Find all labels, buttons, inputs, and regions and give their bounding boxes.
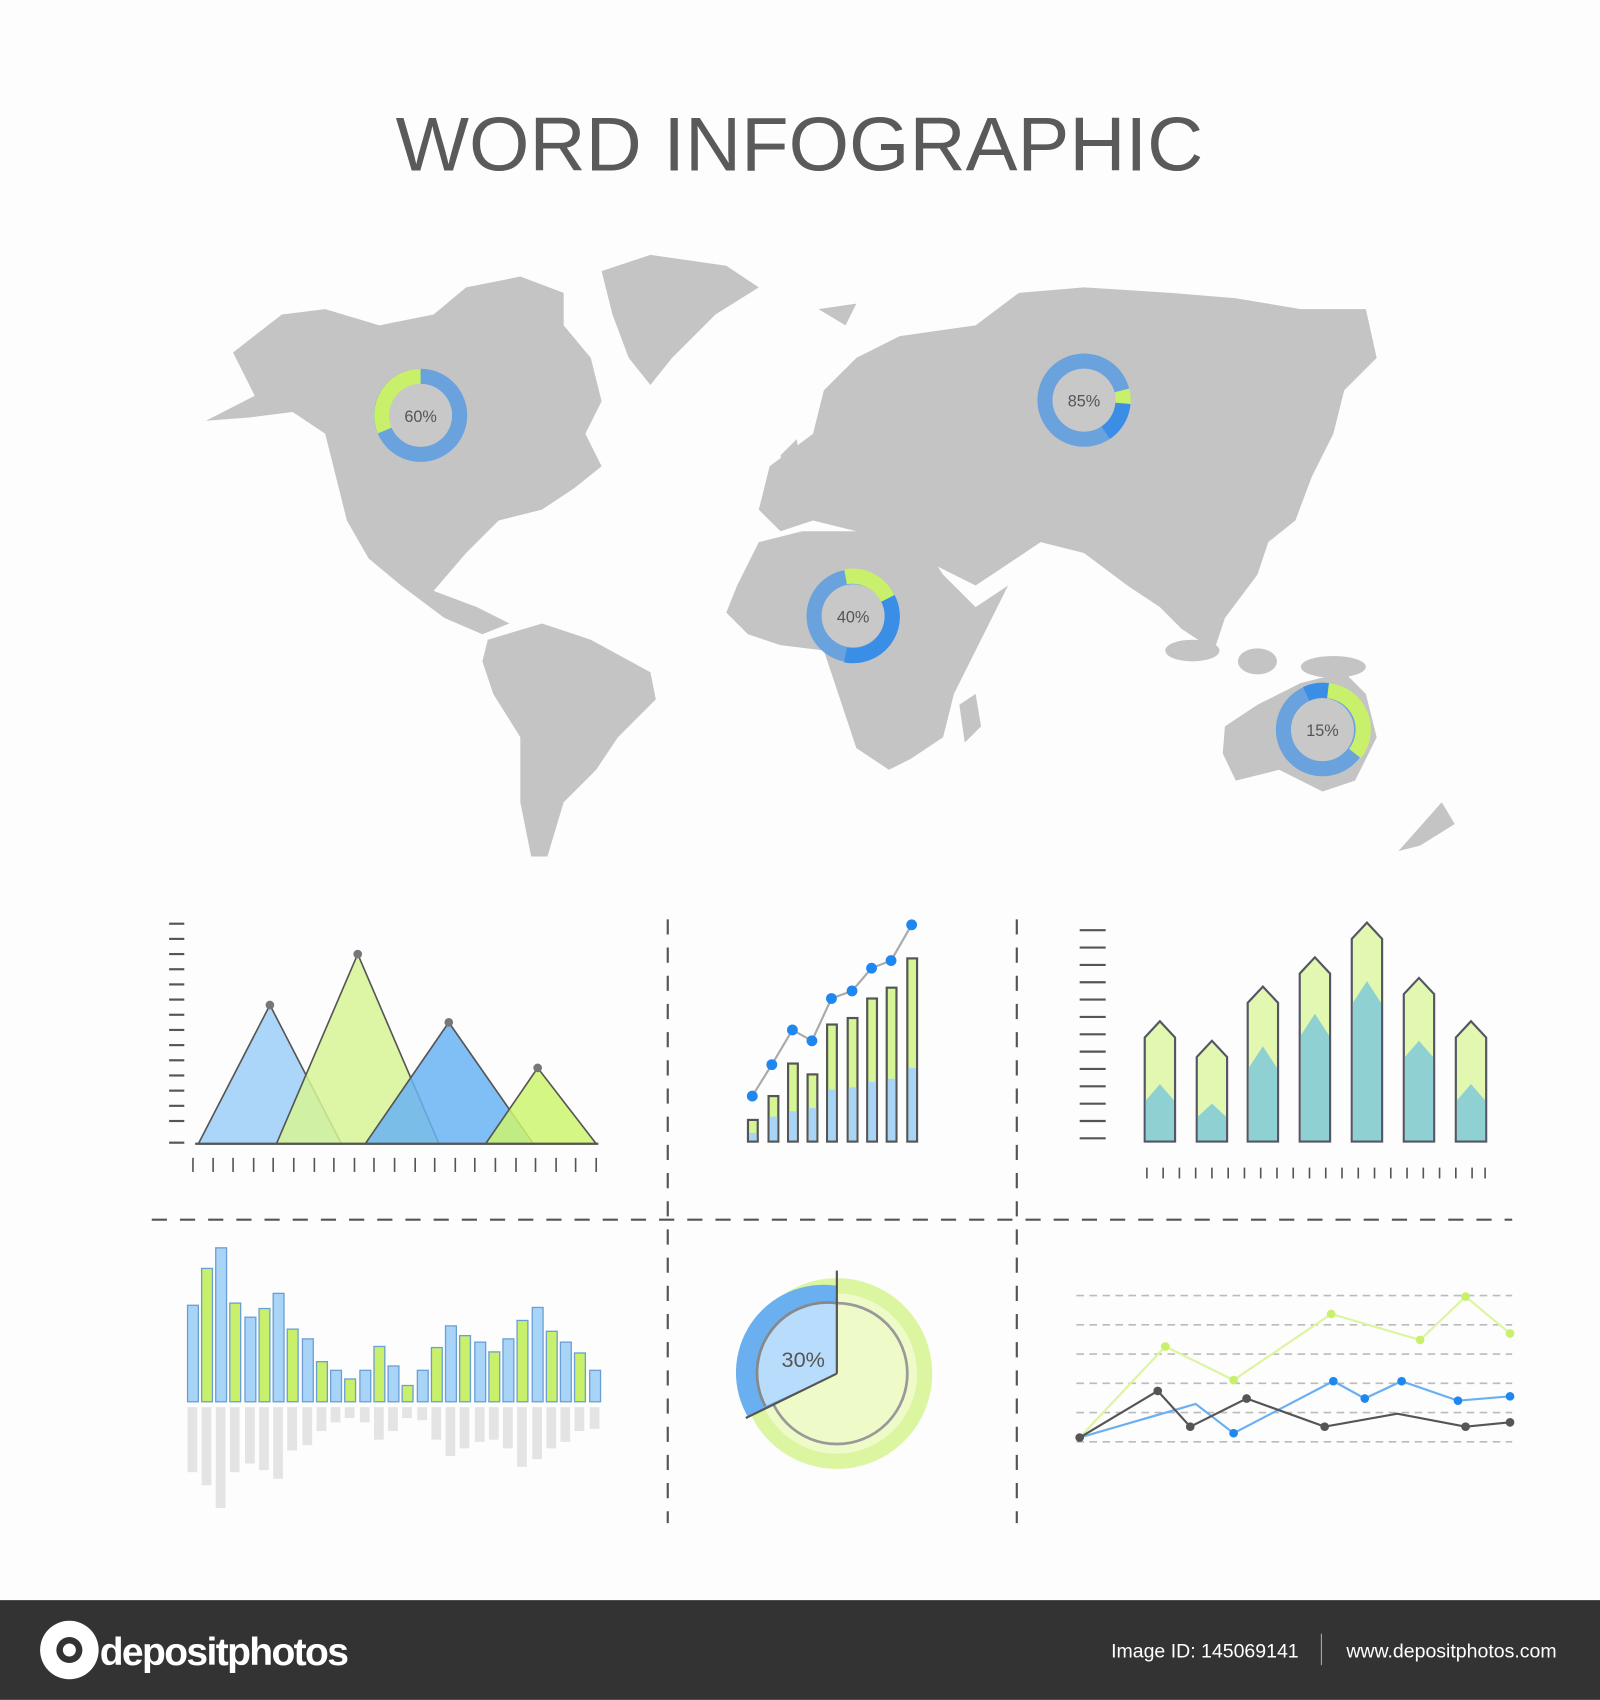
chart: arrow bars (1080, 923, 1486, 1178)
donut: North America 60% (382, 376, 460, 454)
donut: Africa 40% (814, 576, 892, 656)
donut: Australia 15%: 15% (1306, 722, 1339, 740)
footer bar (0, 1600, 1600, 1700)
world map (206, 255, 1455, 857)
donut: Russia 85%: 85% (1068, 393, 1100, 411)
chart: pie 30%: 30% (782, 1347, 825, 1372)
footer logo (40, 1621, 348, 1679)
chart: pie 30% (736, 1271, 925, 1461)
donut: Australia 15% (1283, 690, 1363, 769)
donut: Russia 85% (1045, 361, 1123, 439)
chart: growth bars with line (747, 919, 917, 1142)
chart: mountains (169, 924, 598, 1172)
chart: bars with reflection (188, 1248, 601, 1508)
footer bar: www.depositphotos.com (1345, 1641, 1557, 1663)
donut: Africa 40%: 40% (837, 608, 869, 626)
title: WORD INFOGRAPHIC (396, 102, 1203, 187)
donut: North America 60%: 60% (404, 408, 437, 426)
footer text: Image ID: 145069141 (1111, 1641, 1299, 1663)
footer logo: depositphotos (100, 1631, 348, 1674)
chart: line chart (1075, 1292, 1514, 1442)
